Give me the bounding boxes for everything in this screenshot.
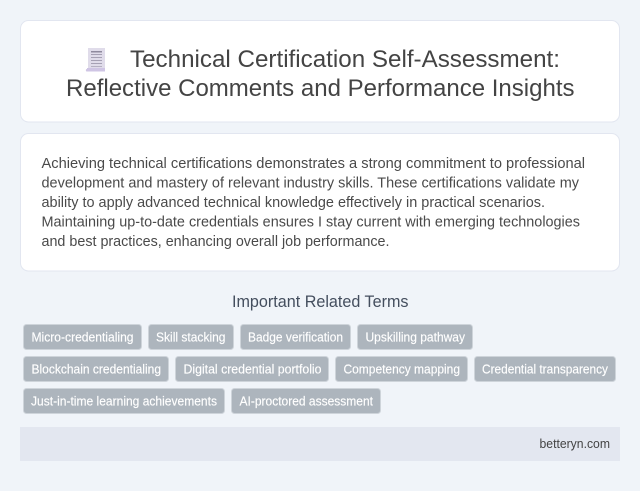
tag: competency mapping: Competency mapping xyxy=(344,362,460,376)
tag: upskilling pathway: Upskilling pathway xyxy=(366,330,465,344)
text block: description: and best practices, enhancing overall job performance. xyxy=(42,233,390,250)
tag: micro-credentialing: Micro-credentialing xyxy=(32,330,134,344)
tag: credential transparency xyxy=(474,356,616,382)
footer credit: betteryn.com xyxy=(540,436,610,451)
tag: badge verification: Badge verification xyxy=(248,330,343,344)
tag: digital credential portfolio xyxy=(176,356,328,382)
footer bar xyxy=(20,427,620,461)
text block: description xyxy=(42,155,585,250)
tag: ai-proctored assessment xyxy=(232,388,380,414)
text block: description: Maintaining up-to-date credentials ensures I stay current with emerging technologies xyxy=(42,214,580,230)
tag: blockchain credentialing xyxy=(24,356,168,382)
tag: skill stacking xyxy=(148,324,234,350)
text block: description: ability to apply advanced technical knowledge effectively in practical scenarios. xyxy=(42,194,545,211)
tag: badge verification xyxy=(240,324,350,350)
tag: just-in-time learning achievements xyxy=(24,388,224,414)
tag: digital credential portfolio: Digital credential portfolio xyxy=(184,362,322,376)
tag: just-in-time learning achievements: Just-in-time learning achievements xyxy=(31,394,217,408)
tag: competency mapping xyxy=(336,356,468,382)
tag list xyxy=(24,324,616,414)
panel: description card xyxy=(20,134,620,271)
text block: description: Achieving technical certifications demonstrates a strong commitment to professional xyxy=(42,155,585,172)
tag: credential transparency: Credential transparency xyxy=(482,362,608,376)
tag: micro-credentialing xyxy=(24,324,142,350)
heading: important related terms: Important Related Terms xyxy=(232,293,408,311)
tag: skill stacking: Skill stacking xyxy=(156,330,226,344)
icon: scroll document xyxy=(86,48,105,72)
title xyxy=(66,46,574,102)
title: Technical Certification Self-Assessment: xyxy=(130,46,560,73)
title: Reflective Comments and Performance Insights xyxy=(66,75,574,102)
panel: title card xyxy=(20,20,620,122)
text block: description: development and mastery of relevant industry skills. These certifications validate my xyxy=(42,174,579,192)
tag: blockchain credentialing: Blockchain credentialing xyxy=(32,362,161,376)
tag: upskilling pathway xyxy=(358,324,472,350)
tag: ai-proctored assessment: AI-proctored assessment xyxy=(240,394,373,408)
